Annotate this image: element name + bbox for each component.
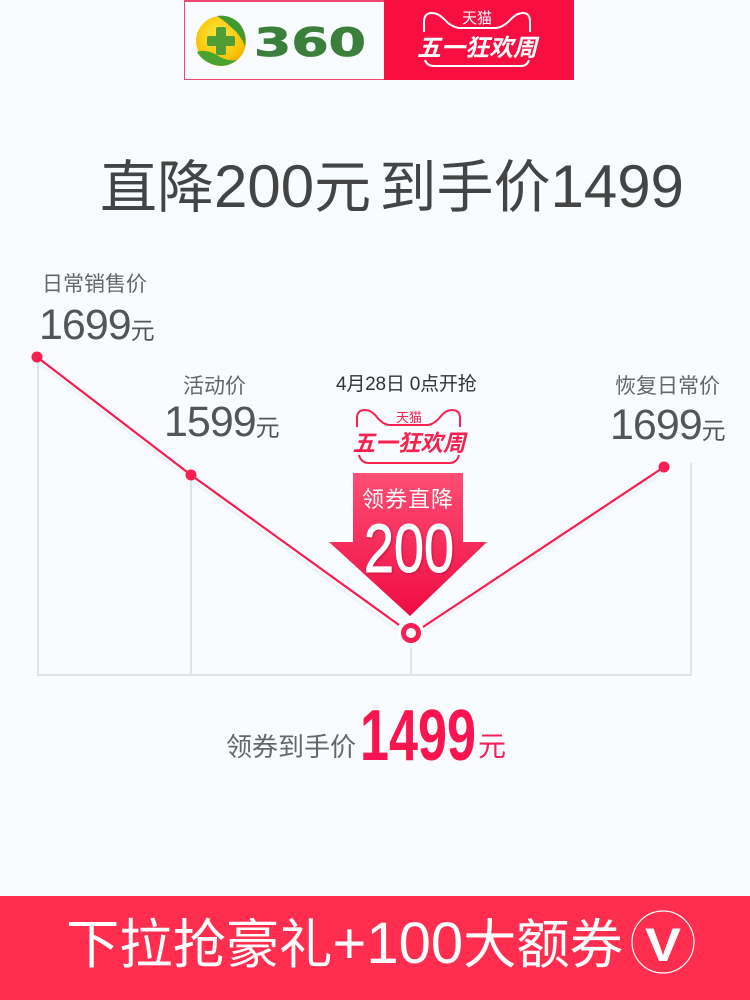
- down arrow callout: 200: [364, 510, 454, 587]
- icon: down chevron circle: [631, 910, 695, 974]
- text: 领券到手价: [226, 732, 356, 762]
- text: 1599元: [164, 398, 279, 446]
- text: 日常销售价: [42, 273, 147, 296]
- final price: [226, 696, 506, 775]
- text: 恢复日常价: [615, 375, 720, 398]
- down arrow callout: [329, 473, 487, 616]
- bottom call to action bar: [0, 896, 750, 1000]
- tmall promo panel: 五一狂欢周: [417, 35, 540, 62]
- date text: 4月28日 0点开抢: [336, 374, 477, 395]
- header logo banner: [184, 0, 574, 80]
- text: 活动价: [183, 375, 246, 398]
- 360 logo panel: 360: [254, 21, 366, 66]
- icon: down chevron circle: V: [645, 918, 682, 971]
- tmall promo panel: 天猫: [462, 10, 492, 27]
- text: 1699元: [610, 401, 725, 449]
- tmall promo panel: [384, 0, 574, 80]
- text: 元: [478, 731, 506, 762]
- price line chart: [32, 352, 692, 676]
- down arrow callout: 领券直降: [362, 487, 454, 512]
- tmall promo mark: 五一狂欢周: [352, 430, 468, 456]
- tmall promo mark: 天猫: [396, 410, 422, 425]
- label: regular price: [39, 273, 154, 349]
- label: restored price: [610, 375, 725, 449]
- main heading: 直降200元 到手价1499: [100, 153, 684, 219]
- 360 logo panel: [184, 0, 385, 80]
- cta text: 下拉抢豪礼+100大额券: [66, 911, 623, 976]
- text: 1699元: [39, 301, 154, 349]
- label: event price: [164, 375, 279, 446]
- tmall promo mark: [352, 409, 468, 464]
